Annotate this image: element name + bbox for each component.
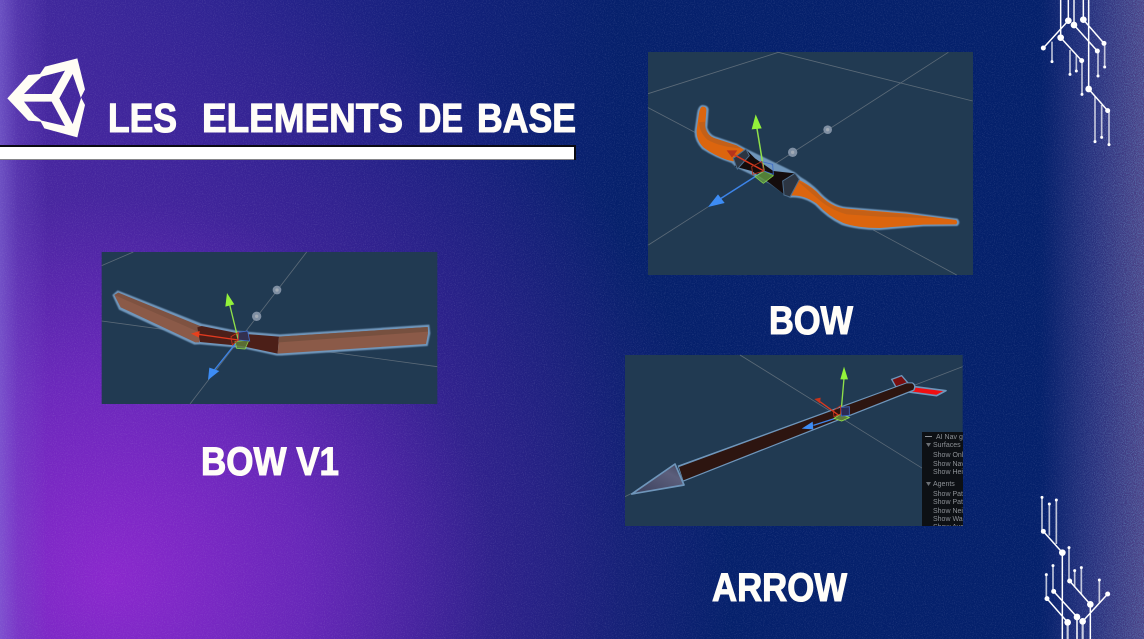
label: BOW: BOW [769, 299, 853, 343]
gizmo [708, 114, 832, 207]
overlay menu panel: AI Nav ge [936, 434, 967, 441]
overlay menu panel: Show Nav [933, 461, 965, 468]
title [108, 95, 576, 141]
label: ARROW: ARROW [712, 566, 847, 610]
overlay menu panel: Agents [933, 481, 955, 488]
title: DE [418, 95, 463, 141]
bow glow outline [112, 290, 430, 356]
overlay menu panel: Show Hei [933, 469, 963, 476]
arrow shaft [678, 382, 916, 482]
title: LES [108, 95, 177, 141]
panel: bow render [648, 52, 973, 275]
overlay menu panel: Show Wal [933, 516, 965, 523]
right limb [278, 327, 428, 354]
overlay menu panel: Show Avo [933, 524, 964, 531]
overlay menu panel: Show Nei [933, 508, 963, 515]
bow grip [735, 150, 795, 195]
panel: arrow render [625, 355, 967, 531]
icon: circuit traces top right [1041, 0, 1110, 146]
gizmo [802, 367, 849, 429]
left limb [114, 293, 201, 342]
panel: bow v1 render [102, 252, 437, 404]
title: BASE [477, 95, 576, 141]
gizmo [191, 286, 281, 380]
title: ELEMENTS [202, 95, 403, 141]
overlay menu panel: Show Pat [933, 491, 963, 498]
overlay menu panel: Show Onl [933, 452, 964, 459]
bow glow outline [695, 105, 959, 230]
overlay menu panel [922, 432, 963, 526]
icon: circuit traces bottom right [1040, 496, 1110, 639]
bow lower limb [784, 179, 957, 228]
bow grip blocks [733, 149, 799, 197]
label: BOW V1: BOW V1 [201, 440, 339, 484]
overlay menu panel: Surfaces [933, 442, 961, 449]
overlay menu panel: Show Pat [933, 499, 963, 506]
center grip [197, 326, 279, 354]
title underline bar [0, 145, 576, 160]
arrow head [632, 464, 684, 494]
bow upper limb [697, 107, 745, 161]
icon: Unity logo [7, 58, 85, 137]
arrow fletching [892, 376, 908, 388]
